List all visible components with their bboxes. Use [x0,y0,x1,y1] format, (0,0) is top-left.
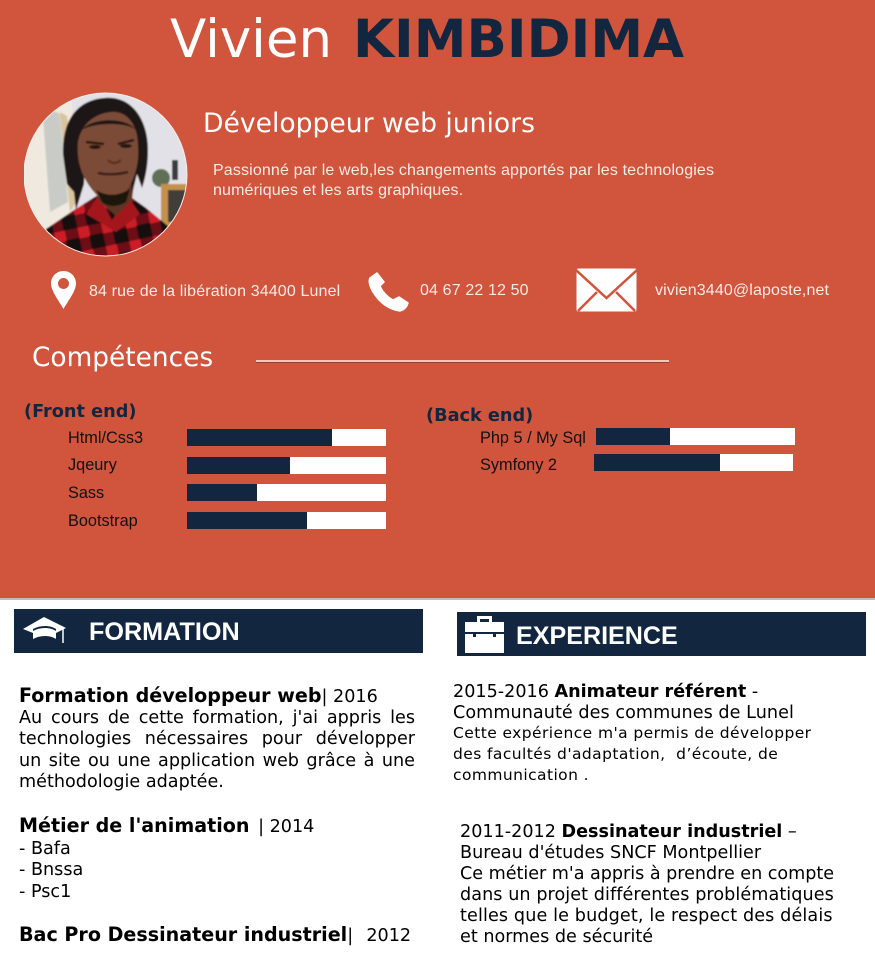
text block: metier de l'animation: Métier de l'animation | 2014 [19,814,314,837]
panel: back end skills [426,406,795,474]
text block: experience 2015-2016: 2015-2016 Animateur référent - [453,682,758,702]
text block: experience 2015-2016 detail [453,724,811,784]
text block: experience 2011-2012 [460,822,834,947]
heading: front end: (Front end) [24,402,136,422]
text block: experience 2015-2016: Communauté des communes de Lunel [453,703,794,723]
banner: formation [14,609,423,653]
text block: experience 2011-2012: dans un projet différentes problématiques [460,885,834,905]
text block: experience 2011-2012: et normes de sécurité [460,927,653,947]
text block: experience 2015-2016 detail: Cette expérience m'a permis de développer [453,724,811,742]
heading: experience: EXPERIENCE [516,622,678,650]
email: vivien3440@laposte,net [655,282,829,299]
text block: experience 2011-2012: Ce métier m'a appris à prendre en compte [460,864,834,884]
text block: experience 2011-2012: 2011-2012 Dessinateur industriel – [460,822,797,842]
address: 84 rue de la libération 34400 Lunel [89,283,340,300]
skill: sass [68,484,386,502]
phone number: 04 67 22 12 50 [420,282,529,299]
icon: location pin [51,271,76,309]
skill: symfony [480,454,793,474]
banner: experience [457,612,866,656]
text block: experience 2015-2016 [453,682,794,723]
skill: jquery [68,456,386,474]
skill: symfony: Symfony 2 [480,456,557,474]
heading: competences: Compétences [32,342,213,373]
skill: jquery: Jqeury [68,456,117,474]
icon: phone [368,272,409,312]
text block: experience 2015-2016 detail: communication . [453,766,589,784]
text block: metier de l'animation: - Bnssa [19,860,83,880]
skill: php [480,428,795,447]
skill: html css: Html/Css3 [68,429,143,447]
text block: bac pro: Bac Pro Dessinateur industriel| 2012 [19,923,411,946]
heading: back end: (Back end) [426,406,533,426]
text block: experience 2015-2016 detail: des facultés d'adaptation, d’écoute, de [453,745,778,763]
icon: briefcase [465,616,504,653]
text block: formation developpeur: Au cours de cette formation, j'ai appris les technologies nécessaires pour développer un site ou une application web grâce à une méthodologie adaptée. [19,708,415,792]
text block: metier de l'animation: - Bafa [19,838,71,858]
skill: bootstrap [68,512,386,530]
intro text [213,162,714,199]
intro text: Passionné par le web,les changements apportés par les technologies [213,162,714,179]
text block: metier de l'animation [19,814,314,902]
job title: Développeur web juniors [203,108,535,139]
icon: envelope [576,268,636,312]
skill: html css [68,429,386,447]
divider [256,360,669,362]
title: name: Vivien KIMBIDIMA [170,9,684,70]
intro text: numériques et les arts graphiques. [213,182,463,199]
icon: portrait photo [24,92,188,256]
text block: metier de l'animation: - Psc1 [19,882,71,902]
skill: bootstrap: Bootstrap [68,512,138,530]
panel: front end skills [24,402,386,530]
panel: header [0,0,875,600]
skill: sass: Sass [68,484,104,502]
icon: graduation cap [23,617,66,643]
text block: experience 2011-2012: telles que le budget, le respect des délais [460,906,833,926]
skill: php: Php 5 / My Sql [480,429,586,447]
text block: formation developpeur: Formation développeur web| 2016 [19,684,378,707]
text block: experience 2011-2012: Bureau d'études SNCF Montpellier [460,843,761,863]
heading: formation: FORMATION [89,618,240,646]
